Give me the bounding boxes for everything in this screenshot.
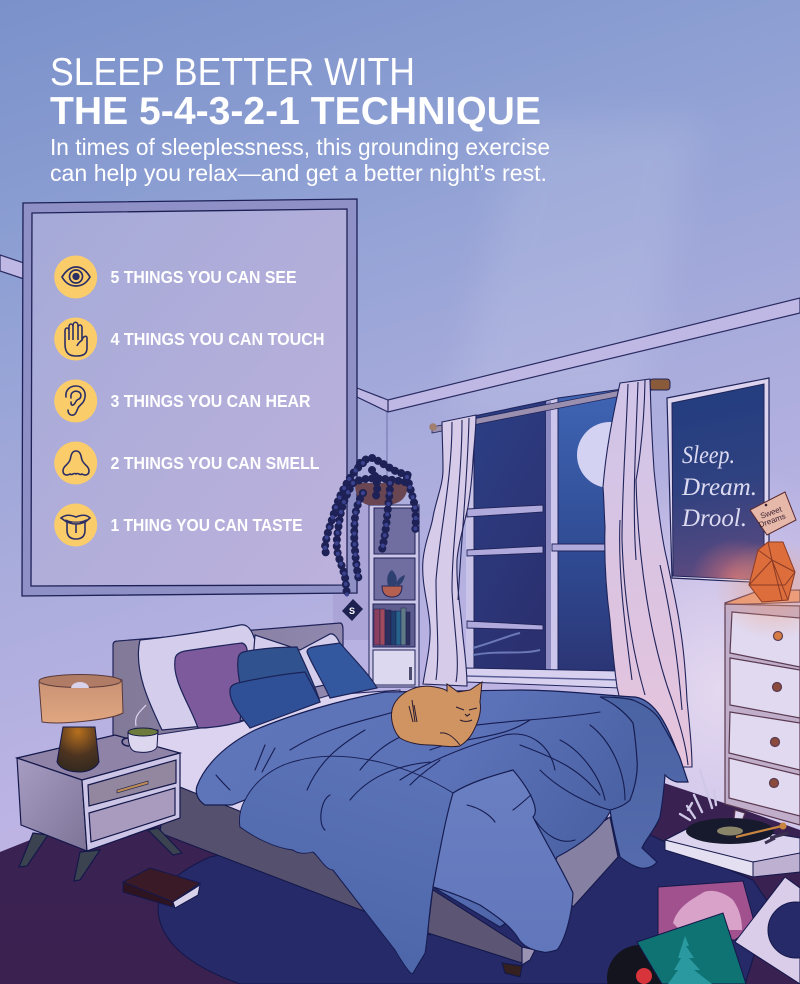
hanging plant	[325, 458, 416, 595]
left curtain	[423, 415, 476, 686]
blanket folds	[216, 710, 625, 841]
icon: nose	[63, 451, 89, 475]
blanket	[196, 690, 688, 974]
dresser	[725, 590, 800, 830]
sweet dreams note: Dreams	[757, 512, 787, 530]
icon: eye	[62, 267, 90, 286]
purple pillow	[175, 643, 247, 728]
tea cup	[122, 705, 158, 752]
blanket main	[196, 690, 680, 973]
ceiling moulding	[0, 255, 800, 640]
poster: Sleep Dream Drool: Sleep.	[682, 442, 735, 469]
mattress and sheet	[155, 690, 400, 830]
row: hear	[54, 380, 311, 422]
icon: ear	[66, 386, 85, 415]
row: smell: 2 THINGS YOU CAN SMELL	[110, 453, 320, 473]
blue pillow back	[238, 647, 320, 726]
row: touch	[54, 318, 324, 360]
rug	[158, 800, 770, 984]
right drape	[600, 697, 688, 868]
title	[50, 51, 541, 133]
floor right	[560, 780, 800, 984]
front flap	[433, 770, 573, 952]
subtitle	[50, 134, 550, 186]
white sleeve	[735, 877, 800, 984]
cat	[391, 682, 482, 747]
book	[123, 868, 200, 908]
lamp	[39, 674, 123, 772]
row: smell	[54, 442, 320, 484]
wall glow near dresser	[530, 460, 800, 920]
moon	[577, 422, 643, 488]
window light beam	[450, 120, 700, 420]
white pillow	[138, 625, 257, 730]
floor	[0, 800, 400, 984]
poster: Sleep Dream Drool: Dream.	[681, 474, 757, 501]
shelf pot plant	[382, 570, 405, 597]
teal album	[637, 913, 746, 984]
shelf books	[374, 608, 410, 645]
nightstand	[17, 735, 182, 881]
sweet dreams note: Sweet	[759, 504, 784, 521]
subtitle: In times of sleeplessness, this grounding exercise	[50, 134, 550, 160]
panel: senses list	[22, 199, 357, 596]
crystal lamp	[749, 542, 795, 602]
row: taste	[54, 504, 302, 546]
row: see	[54, 256, 296, 298]
poster: Sleep Dream Drool	[667, 378, 769, 583]
tag on plant	[342, 599, 363, 621]
vinyl record	[607, 945, 673, 984]
pillows	[138, 625, 377, 730]
icon: tongue	[61, 515, 90, 539]
poster: Sleep Dream Drool: Drool.	[681, 505, 747, 532]
bed headboard	[113, 623, 343, 745]
orange glow	[715, 540, 800, 640]
tag on plant: S	[349, 606, 355, 616]
blue pillow right	[307, 643, 377, 698]
left drape	[239, 756, 453, 974]
title: SLEEP BETTER WITH	[50, 51, 415, 94]
blue pillow front	[230, 672, 320, 728]
row: hear: 3 THINGS YOU CAN HEAR	[110, 391, 311, 411]
bookshelf	[333, 505, 419, 687]
white pillow right	[250, 634, 350, 700]
row: taste: 1 THING YOU CAN TASTE	[110, 515, 302, 535]
window	[466, 385, 643, 688]
icon: hand	[65, 322, 87, 356]
title: THE 5-4-3-2-1 TECHNIQUE	[50, 90, 541, 133]
row: touch: 4 THINGS YOU CAN TOUCH	[110, 329, 324, 349]
right curtain	[603, 379, 692, 767]
curtain rod	[429, 379, 670, 433]
row: see: 5 THINGS YOU CAN SEE	[110, 267, 296, 287]
bed base	[160, 787, 618, 977]
subtitle: can help you relax—and get a better night’s rest.	[50, 160, 547, 186]
pink album	[658, 881, 755, 940]
record player	[665, 770, 800, 877]
sweet dreams note	[750, 492, 796, 535]
